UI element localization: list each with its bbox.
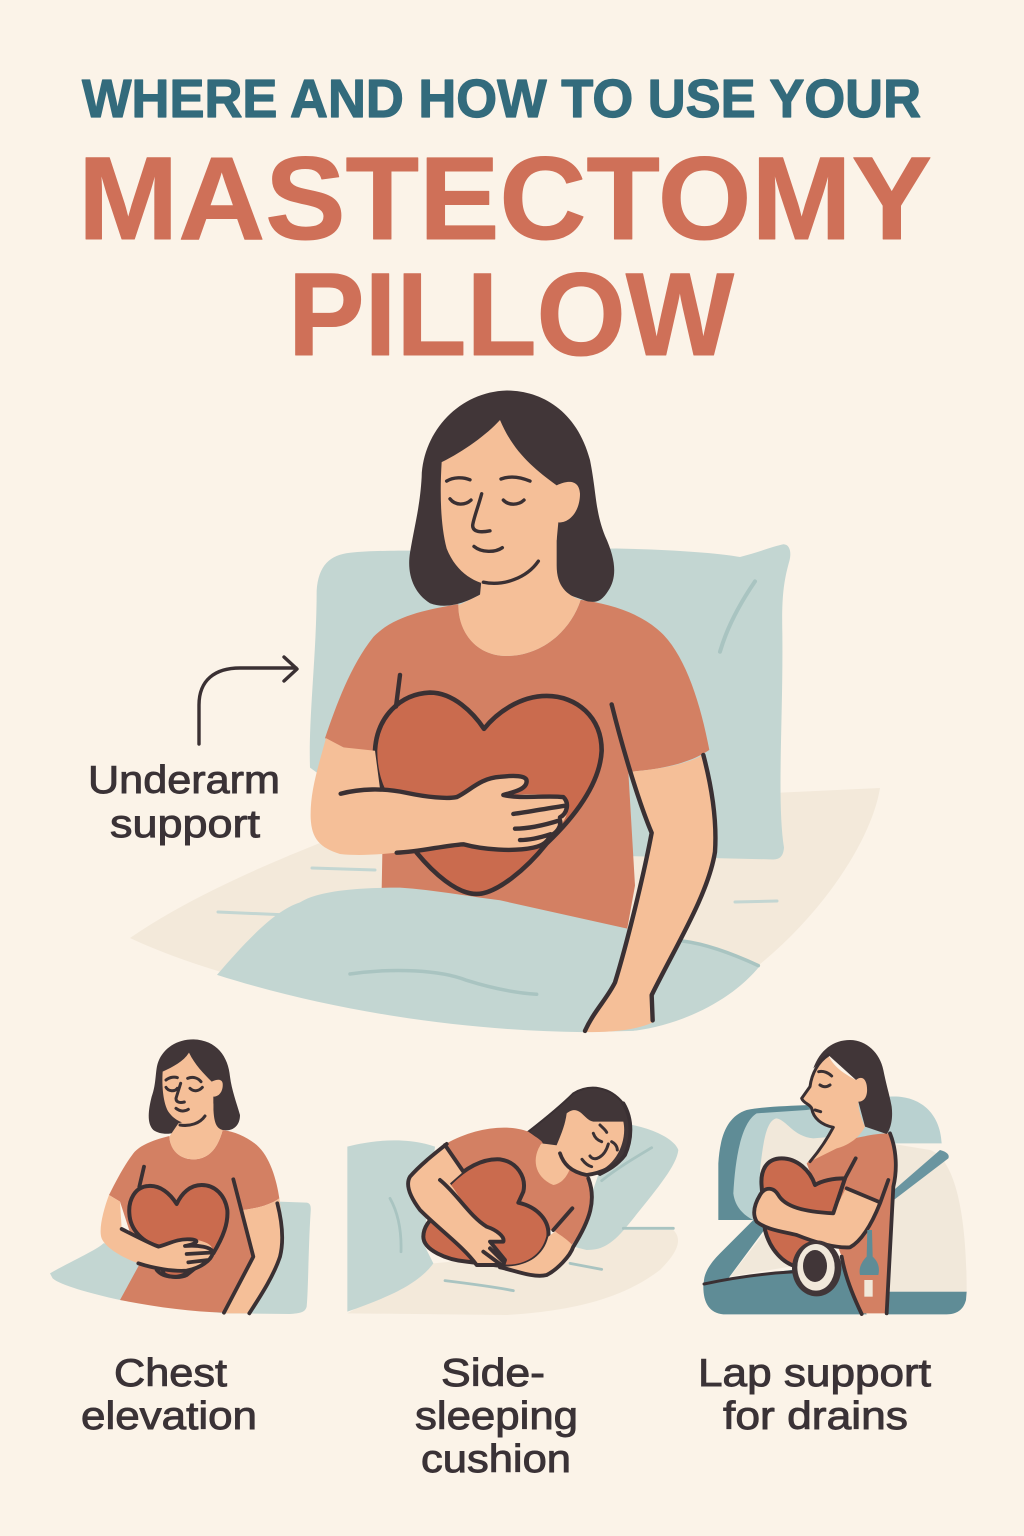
blanket [217, 888, 760, 1032]
pillow crease [720, 581, 755, 652]
far arm outlines [585, 704, 715, 1031]
hair [813, 1040, 892, 1134]
blanket creases [350, 941, 758, 994]
arrow: to underarm [199, 657, 297, 744]
heart pillow [423, 1159, 548, 1267]
label: side-sleeping cushion: cushion [421, 1438, 571, 1481]
label: chest elevation: elevation [81, 1395, 257, 1438]
bed [130, 788, 880, 1031]
face profile [802, 1055, 833, 1162]
label: lap support for drains: for drains [723, 1395, 908, 1438]
hair [528, 1088, 630, 1175]
face and neck [802, 1055, 867, 1162]
head pillow [573, 1123, 678, 1250]
face features [166, 1077, 205, 1125]
back pillow [310, 544, 790, 859]
label: underarm support: support [110, 803, 260, 846]
face [553, 1110, 624, 1173]
arm and hand [101, 1195, 213, 1271]
title [78, 69, 932, 381]
shirt [807, 1133, 896, 1313]
heart pillow [375, 693, 602, 894]
label: lap support for drains: Lap support [698, 1352, 931, 1395]
arm [754, 1187, 878, 1247]
label: chest elevation [81, 1352, 257, 1438]
arm and finger outlines [341, 675, 567, 853]
label: side-sleeping cushion [415, 1352, 578, 1481]
label: side-sleeping cushion: sleeping [415, 1395, 578, 1438]
label: lap support for drains [698, 1352, 931, 1438]
shirt [109, 1130, 279, 1313]
drain bulb [860, 1230, 879, 1297]
car seat base [703, 1220, 967, 1314]
seat belt [890, 1150, 949, 1202]
neck [536, 1143, 570, 1185]
headrest frame [718, 1105, 823, 1220]
label: underarm support: Underarm [88, 759, 280, 802]
outlines [754, 1133, 896, 1314]
panel: side-sleeping illustration [347, 1088, 678, 1315]
face [162, 1053, 223, 1124]
label: chest elevation: Chest [114, 1352, 227, 1395]
outlines [408, 1144, 592, 1276]
hair [409, 391, 614, 606]
creases [390, 1148, 673, 1291]
seat edge line [704, 1272, 797, 1284]
face features [582, 1125, 617, 1167]
pillow [50, 1202, 311, 1314]
face [441, 420, 580, 585]
bed sheet creases [218, 868, 777, 915]
neck [169, 1103, 223, 1159]
face features [447, 477, 538, 583]
label: side-sleeping cushion: Side- [441, 1352, 545, 1395]
panel: lap support for drains illustration [703, 1040, 967, 1314]
shirt [325, 600, 709, 932]
near arm and hand [408, 1145, 505, 1267]
heart pillow [129, 1185, 227, 1277]
neck [458, 523, 581, 656]
shirt [447, 1128, 592, 1245]
far arm [585, 754, 715, 1032]
title line: pillow: PILLOW [288, 249, 735, 381]
lower arm [503, 1232, 573, 1276]
jaw and head outline [560, 1103, 630, 1175]
outlines [122, 1167, 282, 1313]
bed [347, 1230, 678, 1315]
seat cream [730, 1118, 967, 1292]
heart pillow [761, 1158, 845, 1267]
hair [149, 1039, 240, 1134]
panel: chest elevation illustration [50, 1039, 311, 1314]
label: underarm support [88, 759, 280, 846]
drain ring [792, 1240, 841, 1296]
blanket [347, 1140, 435, 1312]
title line: mastectomy: MASTECTOMY [78, 133, 932, 265]
title line: where and how: WHERE AND HOW TO USE YOUR [82, 69, 921, 129]
headrest light [733, 1097, 942, 1220]
far arm [223, 1198, 282, 1313]
main illustration: woman in bed hugging heart pillow [130, 391, 880, 1032]
near arm and hand [311, 738, 568, 855]
